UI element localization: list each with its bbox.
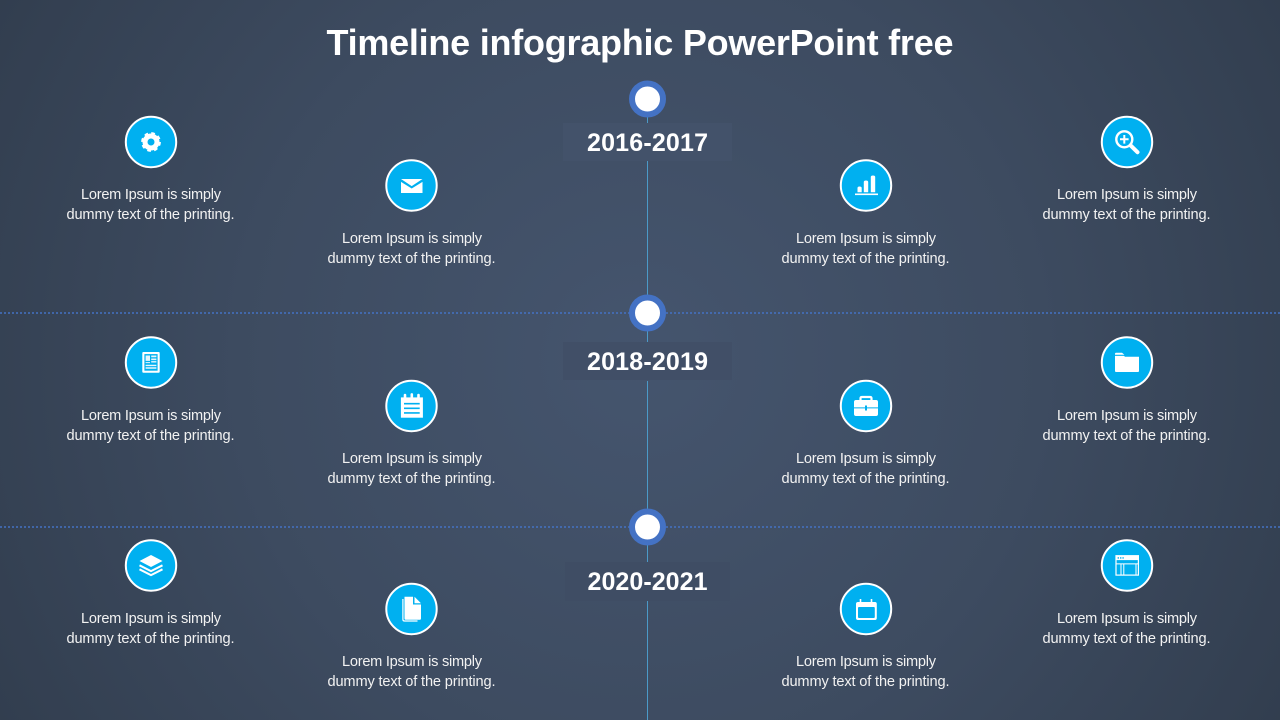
text: item 4: Lorem Ipsum is simply bbox=[1057, 187, 1198, 203]
text: item 3 bbox=[782, 231, 950, 267]
icon: mail bbox=[386, 160, 437, 211]
text: item 5: dummy text of the printing. bbox=[66, 428, 234, 444]
icon: calendar bbox=[841, 584, 891, 634]
text: item 4 bbox=[1042, 187, 1210, 223]
title: Timeline infographic PowerPoint free bbox=[326, 22, 954, 63]
text: item 3: dummy text of the printing. bbox=[782, 251, 950, 267]
node 2016-2017 bbox=[632, 84, 663, 114]
node 2018-2019 bbox=[632, 298, 663, 328]
text: item 7: dummy text of the printing. bbox=[782, 471, 950, 487]
icon: newspaper bbox=[126, 337, 176, 388]
year label 2016-2017 bbox=[563, 123, 732, 161]
icon: file bbox=[386, 584, 437, 634]
text: item 12: dummy text of the printing. bbox=[1042, 631, 1210, 647]
text: item 9 bbox=[66, 611, 234, 647]
icon: notepad bbox=[386, 381, 437, 431]
text: item 12: Lorem Ipsum is simply bbox=[1057, 611, 1198, 627]
text: item 11: Lorem Ipsum is simply bbox=[796, 654, 937, 670]
text: item 3: Lorem Ipsum is simply bbox=[796, 231, 937, 247]
year label 2018-2019 bbox=[563, 342, 732, 380]
text: item 5: Lorem Ipsum is simply bbox=[81, 408, 222, 424]
text: item 12 bbox=[1042, 611, 1210, 647]
text: item 4: dummy text of the printing. bbox=[1042, 207, 1210, 223]
text: item 8: dummy text of the printing. bbox=[1042, 428, 1210, 444]
icon: layers bbox=[126, 540, 176, 591]
node 2020-2021 bbox=[632, 512, 663, 542]
icon: folder bbox=[1102, 337, 1152, 388]
icon: magnifier bbox=[1102, 117, 1152, 167]
icon: bar chart bbox=[841, 160, 891, 211]
text: item 6 bbox=[328, 451, 496, 487]
year label 2020-2021 bbox=[565, 562, 730, 601]
text: item 10: dummy text of the printing. bbox=[328, 674, 496, 690]
text: item 7 bbox=[782, 451, 950, 487]
text: item 1: dummy text of the printing. bbox=[66, 207, 234, 223]
text: item 9: Lorem Ipsum is simply bbox=[81, 611, 222, 627]
icon: gear bbox=[126, 117, 176, 167]
text: item 10: Lorem Ipsum is simply bbox=[342, 654, 483, 670]
text: item 5 bbox=[66, 408, 234, 444]
text: item 8 bbox=[1042, 408, 1210, 444]
text: item 8: Lorem Ipsum is simply bbox=[1057, 408, 1198, 424]
text: item 7: Lorem Ipsum is simply bbox=[796, 451, 937, 467]
text: item 11 bbox=[782, 654, 950, 690]
text: item 11: dummy text of the printing. bbox=[782, 674, 950, 690]
year label 2018-2019: 2018-2019 bbox=[587, 348, 708, 376]
text: item 2: Lorem Ipsum is simply bbox=[342, 231, 483, 247]
year label 2020-2021: 2020-2021 bbox=[588, 568, 708, 596]
year label 2016-2017: 2016-2017 bbox=[587, 129, 708, 157]
text: item 1: Lorem Ipsum is simply bbox=[81, 187, 222, 203]
text: item 2: dummy text of the printing. bbox=[328, 251, 496, 267]
text: item 9: dummy text of the printing. bbox=[66, 631, 234, 647]
icon: briefcase bbox=[841, 381, 891, 431]
icon: browser window bbox=[1102, 540, 1152, 591]
timeline vertical axis bbox=[646, 110, 648, 720]
text: item 6: dummy text of the printing. bbox=[328, 471, 496, 487]
text: item 1 bbox=[66, 187, 234, 223]
text: item 2 bbox=[328, 231, 496, 267]
text: item 10 bbox=[328, 654, 496, 690]
text: item 6: Lorem Ipsum is simply bbox=[342, 451, 483, 467]
